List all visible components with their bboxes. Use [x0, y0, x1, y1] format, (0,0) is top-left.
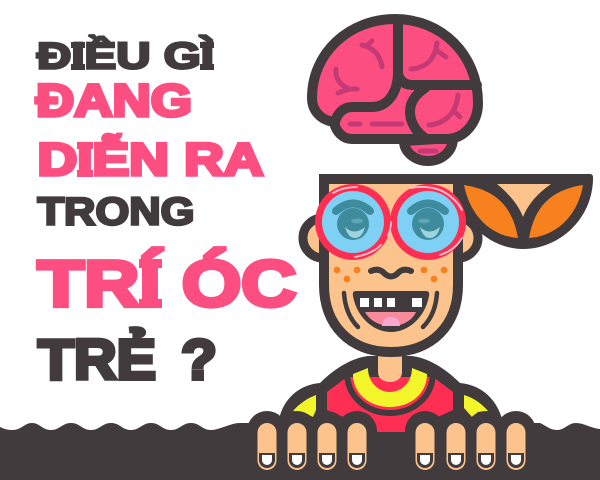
- head: [324, 179, 458, 352]
- finger 2: [288, 423, 306, 470]
- brain inner divisions: [335, 20, 477, 138]
- freckles: [334, 267, 447, 282]
- right orange leaf: [529, 185, 583, 238]
- left sleeve: [293, 395, 316, 417]
- head top bar: [319, 174, 593, 184]
- title line: DIỄN RA: DIỄN RA: [38, 133, 264, 185]
- tongue: [365, 312, 416, 326]
- cheek lines: [344, 293, 437, 327]
- lens highlights: [333, 187, 462, 257]
- open head bowl with leaves: [453, 174, 593, 249]
- brain: [312, 19, 478, 161]
- finger 4: [348, 423, 366, 470]
- brain lower lobe: [404, 138, 453, 161]
- title line: TRONG: TRONG: [38, 191, 194, 234]
- finger 1: [258, 423, 276, 470]
- title line: TRÍ ÓC: TRÍ ÓC: [38, 247, 296, 320]
- nose and moustache: [371, 270, 411, 276]
- title line: ĐANG: ĐANG: [36, 75, 192, 126]
- fingers: [258, 423, 526, 470]
- collar dark outline: [347, 372, 433, 413]
- body silhouette: [278, 356, 504, 430]
- left lens: [315, 184, 391, 260]
- bottom wavy band: [0, 423, 600, 480]
- yellow collar: [353, 368, 427, 407]
- title line: TRẺ ?: TRẺ: [38, 327, 156, 392]
- right ear: [438, 218, 478, 258]
- child body: [247, 356, 536, 451]
- finger 6: [446, 423, 466, 470]
- title: [36, 36, 296, 392]
- right lens: [390, 184, 466, 260]
- title line: ĐIỀU GÌ: ĐIỀU GÌ: [37, 36, 214, 77]
- mouth: [353, 291, 429, 332]
- neck: [378, 356, 402, 382]
- bowl shape: [453, 174, 593, 249]
- face: [319, 174, 593, 352]
- title line: TRẺ ?: ?: [181, 329, 217, 392]
- skin triangle: [497, 184, 551, 217]
- tongue highlight: [382, 317, 400, 326]
- teeth: [360, 298, 422, 307]
- brain body: [312, 19, 478, 139]
- left orange leaf: [464, 185, 518, 238]
- glasses: [315, 184, 466, 260]
- finger 3: [318, 423, 336, 470]
- finger 5: [416, 423, 434, 470]
- red shirt: [327, 377, 453, 432]
- knuckle bumps: [247, 411, 536, 451]
- finger 7: [476, 423, 496, 470]
- brain folds: [336, 41, 460, 151]
- title line: TRẺ ?: [38, 327, 217, 392]
- left ear: [303, 218, 343, 258]
- right sleeve: [464, 395, 488, 417]
- finger 8: [506, 423, 526, 470]
